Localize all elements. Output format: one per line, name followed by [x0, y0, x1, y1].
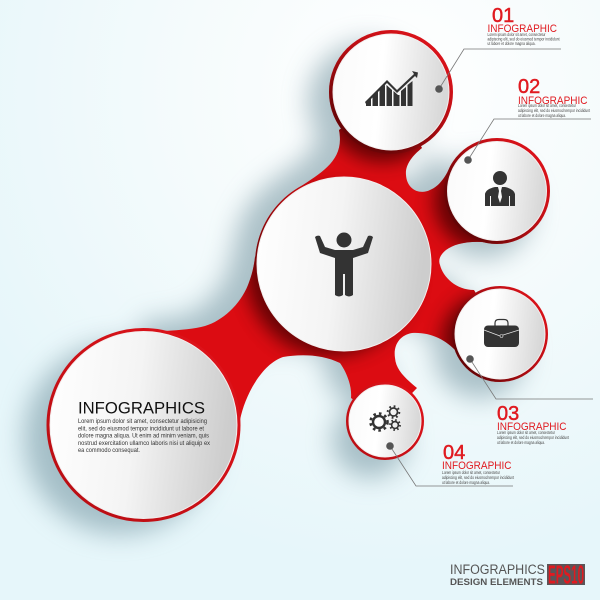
main body text: Lorem ipsum dolor sit amet, consectetur adipisicing [78, 418, 207, 425]
callout 01: 01 [492, 5, 514, 27]
icon: briefcase [484, 320, 519, 347]
main body text: dolore magna aliqua. Ut enim ad minim veniam, quis [78, 432, 209, 440]
icon: businessman [485, 171, 515, 206]
callout 02: 02 [518, 76, 540, 98]
icon: growth chart [365, 71, 418, 106]
icon: gears [370, 406, 400, 430]
callout 01 [435, 5, 561, 93]
leader line 03 [466, 355, 593, 399]
main body text: ea commodo consequat. [78, 447, 140, 454]
leader line 02 [464, 119, 591, 164]
leader line 04 [386, 442, 513, 486]
callout 01: INFOGRAPHIC [488, 23, 557, 35]
callout 03 [466, 355, 593, 445]
callout 04: adipiscing elit, sed do eiusmod tempor incididunt [442, 475, 515, 480]
leader line 01 [435, 49, 561, 93]
main body text [78, 418, 210, 454]
callout 04: 04 [443, 442, 465, 464]
disc: 04 with gears [349, 385, 421, 457]
footer branding [450, 560, 585, 590]
icon: person arms raised [315, 232, 373, 296]
disc: 01 with chart [333, 34, 449, 150]
callout 03: INFOGRAPHIC [497, 421, 567, 433]
callout 04 [386, 442, 515, 486]
disc: main [50, 332, 237, 518]
main body text: elit, sed do eiusmod tempor incididunt ut labore et [78, 425, 204, 432]
red metaball connector [46, 30, 550, 522]
callout 04: ut labore et dolore magna aliqua. [442, 480, 490, 485]
callout 02: ut labore et dolore magna aliqua. [518, 113, 566, 118]
callout 02 [464, 76, 591, 164]
callout 03: ut labore et dolore magna aliqua. [497, 440, 545, 445]
cast shadows [24, 42, 533, 534]
callout 03: Lorem ipsum dolor sit amet, consectetur [497, 430, 555, 435]
disc: 02 with businessman [448, 142, 546, 240]
callout 02: Lorem ipsum dolor sit amet, consectetur [518, 103, 576, 108]
disc: 03 with briefcase [455, 289, 545, 379]
callout 01: adipiscing elit, sed do eiusmod tempor incididunt [488, 36, 560, 42]
main body text: nostrud exercitation ullamco laboris nisi ut aliquip ex [78, 440, 210, 447]
callout 01: Lorem ipsum dolor sit amet, consectetur [488, 32, 546, 37]
disc: center with person [257, 177, 431, 351]
footer branding: INFOGRAPHICS [450, 562, 545, 577]
callout 02: INFOGRAPHIC [518, 95, 588, 107]
main heading: INFOGRAPHICS [78, 398, 205, 418]
callout 03: 03 [497, 403, 519, 425]
callout 03: adipiscing elit, sed do eiusmod tempor incididunt [497, 435, 570, 440]
callout 04: INFOGRAPHIC [442, 460, 512, 472]
footer branding: DESIGN ELEMENTS [450, 577, 543, 587]
callout 04: Lorem ipsum dolor sit amet, consectetur [442, 470, 500, 475]
callout 01: ut labore et dolore magna aliqua. [488, 41, 536, 46]
